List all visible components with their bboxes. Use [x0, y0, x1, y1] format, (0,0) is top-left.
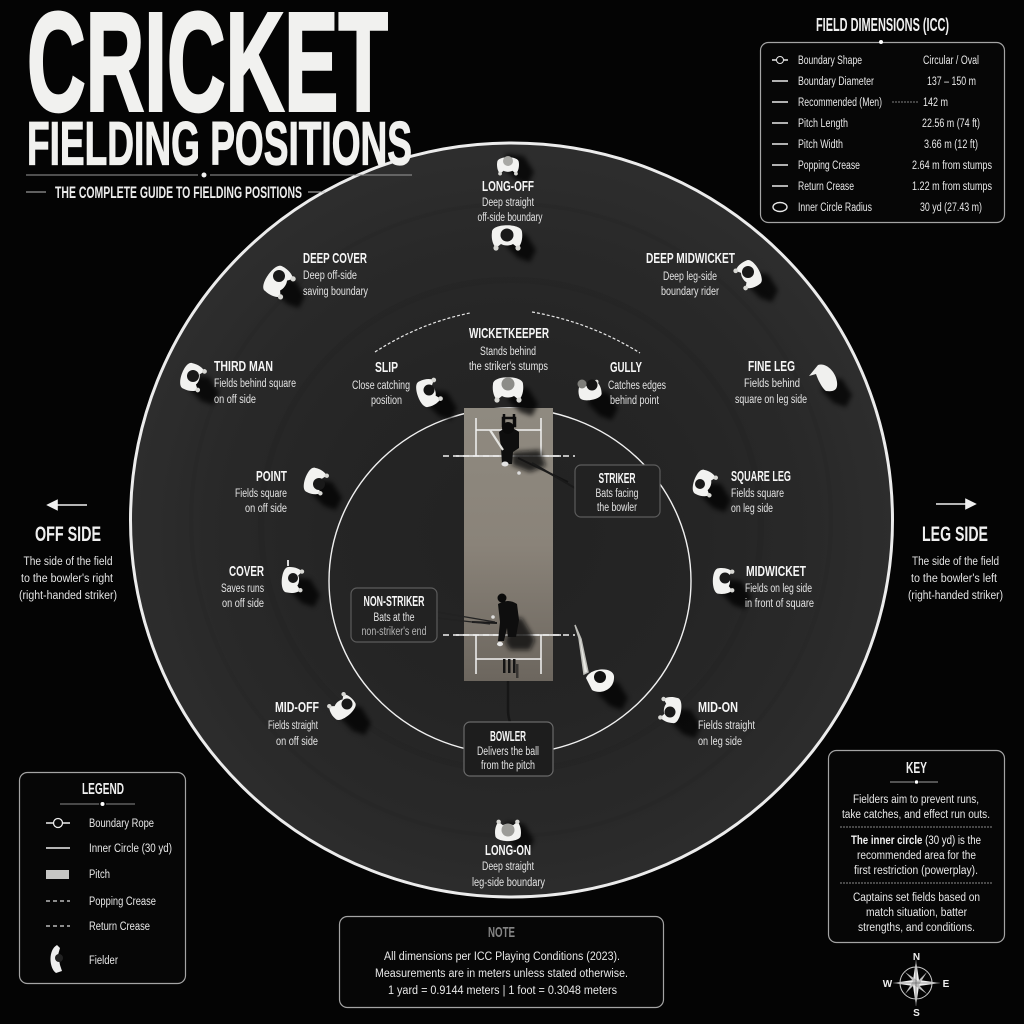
position: midwicket: MIDWICKET [746, 563, 806, 580]
legend: popping crease: Popping Crease [89, 896, 156, 908]
position: wicketkeeper: WICKETKEEPER [469, 325, 549, 342]
position: point: on off side [245, 503, 287, 515]
position: deep midwicket: boundary rider [661, 286, 719, 298]
panel: leg side [908, 500, 1003, 602]
callout: bowler [464, 722, 553, 776]
panel: note: NOTE [488, 924, 515, 941]
position: fine leg: FINE LEG [748, 358, 795, 375]
position: deep midwicket [646, 250, 778, 302]
row values: 3.66 m (12 ft) [924, 139, 978, 151]
row icons [772, 56, 788, 212]
position: mid-on: Fields straight [698, 720, 756, 732]
panel: key [828, 750, 1004, 942]
callout: bowler: from the pitch [481, 760, 535, 772]
label: long-off: off-side boundary [478, 212, 543, 224]
panel: off side: OFF SIDE [35, 523, 101, 546]
panel: note: 1 yard = 0.9144 meters | 1 foot = 0.3048 meters [388, 985, 617, 997]
position: slip: position [371, 395, 402, 407]
position: mid-off: Fields straight [268, 720, 319, 732]
pitch [443, 408, 575, 681]
position: wicketkeeper [469, 325, 549, 416]
label: long-off: LONG-OFF [482, 178, 534, 195]
position: deep cover: saving boundary [303, 286, 368, 298]
position: wicketkeeper: the striker's stumps [469, 361, 548, 373]
label: long-off: Deep straight [482, 197, 535, 209]
position: cover: on off side [222, 598, 264, 610]
position: point: POINT [256, 468, 287, 485]
inner circle [329, 408, 691, 754]
legend: boundary rope: Boundary Rope [89, 818, 154, 830]
callout: striker: the bowler [597, 502, 637, 514]
position: cover: COVER [229, 563, 264, 580]
panel: legend: LEGEND [82, 781, 124, 798]
callout: bowler: BOWLER [490, 728, 526, 745]
row labels: Pitch Length [798, 118, 848, 130]
position: slip: SLIP [375, 359, 398, 376]
icon: compass: W [883, 979, 893, 990]
icon: compass: S [913, 1008, 920, 1019]
subtitle: THE COMPLETE GUIDE TO FIELDING POSITIONS [55, 184, 302, 202]
playing field [130, 143, 892, 897]
panel: note [340, 916, 664, 1008]
position: third man: Fields behind square [214, 378, 296, 390]
legend: inner circle: Inner Circle (30 yd) [89, 843, 172, 855]
position: cover: Saves runs [221, 583, 264, 595]
panel: key: recommended area for the [857, 850, 976, 862]
top crease lines [443, 418, 575, 456]
position: midwicket [713, 563, 814, 610]
legend: pitch [46, 869, 110, 881]
position: midwicket: in front of square [745, 598, 814, 610]
fielder: long-off rear [497, 154, 534, 184]
arrow: leg side [936, 500, 975, 508]
position: slip [352, 359, 457, 420]
figure: non-striker [472, 594, 535, 650]
label: long-off [478, 178, 543, 224]
row labels: Inner Circle Radius [798, 202, 872, 214]
position: point: Fields square [235, 488, 287, 500]
position: third man: THIRD MAN [214, 358, 273, 375]
stumps [503, 659, 518, 678]
panel: leg side: (right-handed striker) [908, 590, 1003, 602]
position: point [235, 466, 342, 515]
icon: compass: N [913, 952, 920, 963]
panel: key: match situation, batter [866, 907, 967, 919]
legend: inner circle [46, 843, 172, 855]
legend: return crease [46, 921, 150, 933]
panel: note: All dimensions per ICC Playing Conditions (2023). [384, 951, 620, 963]
panel: key: KEY [906, 760, 927, 777]
dotted catching arc [375, 312, 640, 353]
panel: note: Measurements are in meters unless stated otherwise. [375, 968, 628, 980]
row values: 22.56 m (74 ft) [922, 118, 980, 130]
row values: Circular / Oval [923, 55, 979, 67]
figure: striker [490, 414, 568, 482]
callout: striker: Bats facing [596, 488, 638, 500]
position: mid-off [268, 690, 371, 748]
panel: key: The inner circle (30 yd) is the [851, 835, 981, 847]
panel: off side: to the bowler's right [21, 573, 114, 585]
row values: 142 m [923, 97, 948, 109]
legend: fielder [50, 945, 118, 973]
position: slip: Close catching [352, 380, 410, 392]
title [26, 0, 412, 178]
position: mid-on [658, 695, 756, 748]
position: fine leg [735, 358, 852, 407]
legend: return crease: Return Crease [89, 921, 150, 933]
panel: key: strengths, and conditions. [858, 922, 975, 934]
icon: compass: E [943, 979, 950, 990]
legend: boundary rope [46, 818, 154, 830]
callout: striker [532, 463, 660, 517]
position: square leg: on leg side [731, 503, 773, 515]
callout: non-striker: Bats at the [374, 612, 414, 624]
row labels: Popping Crease [798, 160, 860, 172]
panel: off side [19, 500, 117, 602]
legend: pitch: Pitch [89, 869, 110, 881]
position: fine leg: square on leg side [735, 394, 807, 406]
row values: 137 – 150 m [927, 76, 976, 88]
position: long-on: LONG-ON [485, 842, 531, 859]
icon: compass [883, 952, 950, 1019]
position: gully: Catches edges [608, 380, 666, 392]
position: long-on [472, 820, 545, 889]
panel: key: Fielders aim to prevent runs, [853, 794, 979, 806]
row labels: Pitch Width [798, 139, 843, 151]
callout: striker: STRIKER [598, 470, 636, 487]
position: mid-on: MID-ON [698, 699, 738, 716]
row labels: Boundary Diameter [798, 76, 874, 88]
panel: leg side: The side of the field [912, 556, 999, 568]
position: gully: GULLY [610, 359, 642, 376]
legend: popping crease [46, 896, 156, 908]
position: deep cover: Deep off-side [303, 270, 357, 282]
title: FIELDING POSITIONS [27, 110, 412, 178]
callout: non-striker [351, 588, 495, 642]
figure: bowler fielder [575, 625, 628, 710]
bottom crease lines [443, 635, 575, 674]
position: long-off [478, 154, 543, 262]
row labels: Boundary Shape [798, 55, 862, 67]
panel: off side: The side of the field [24, 556, 112, 568]
position: deep cover [259, 250, 368, 308]
position: square leg [690, 468, 791, 515]
position: midwicket: Fields on leg side [745, 583, 812, 595]
position: gully [577, 359, 666, 420]
position: mid-off: on off side [276, 736, 318, 748]
row labels: Return Crease [798, 181, 854, 193]
position: fine leg: Fields behind [744, 378, 800, 390]
row values: 1.22 m from stumps [912, 181, 992, 193]
callout: non-striker: NON-STRIKER [364, 593, 425, 610]
panel: key: take catches, and effect run outs. [842, 809, 990, 821]
panel: leg side: to the bowler's left [911, 573, 998, 585]
position: square leg: Fields square [731, 488, 784, 500]
row values [912, 55, 992, 214]
fielder: long-off front [492, 225, 536, 262]
position: deep midwicket: Deep leg-side [663, 271, 717, 283]
position: deep cover: DEEP COVER [303, 250, 367, 267]
panel: field dimensions [760, 40, 1004, 222]
position: mid-off: MID-OFF [275, 699, 319, 716]
position: gully: behind point [610, 395, 660, 407]
position: third man: on off side [214, 394, 256, 406]
callout: non-striker: non-striker's end [362, 626, 426, 638]
connector: bowler [508, 681, 510, 722]
position: mid-on: on leg side [698, 736, 742, 748]
position: deep midwicket: DEEP MIDWICKET [646, 250, 735, 267]
position: long-on: Deep straight [482, 861, 535, 873]
row labels: Recommended (Men) [798, 97, 882, 109]
callout: bowler: Delivers the ball [477, 746, 539, 758]
row values: 2.64 m from stumps [912, 160, 992, 172]
position: long-on: leg-side boundary [472, 877, 545, 889]
position: third man [177, 358, 296, 406]
panel: off side: (right-handed striker) [19, 590, 117, 602]
panel: legend [20, 772, 186, 984]
panel: leg side: LEG SIDE [922, 523, 988, 546]
row values: 30 yd (27.43 m) [920, 202, 982, 214]
row labels [798, 55, 882, 214]
position: wicketkeeper: Stands behind [480, 346, 536, 358]
position: square leg: SQUARE LEG [731, 468, 791, 485]
arrow: off side [48, 500, 87, 510]
panel: key: Captains set fields based on [853, 892, 980, 904]
position: cover [221, 560, 320, 610]
panel: key: first restriction (powerplay). [854, 865, 978, 877]
legend: fielder: Fielder [89, 955, 118, 967]
